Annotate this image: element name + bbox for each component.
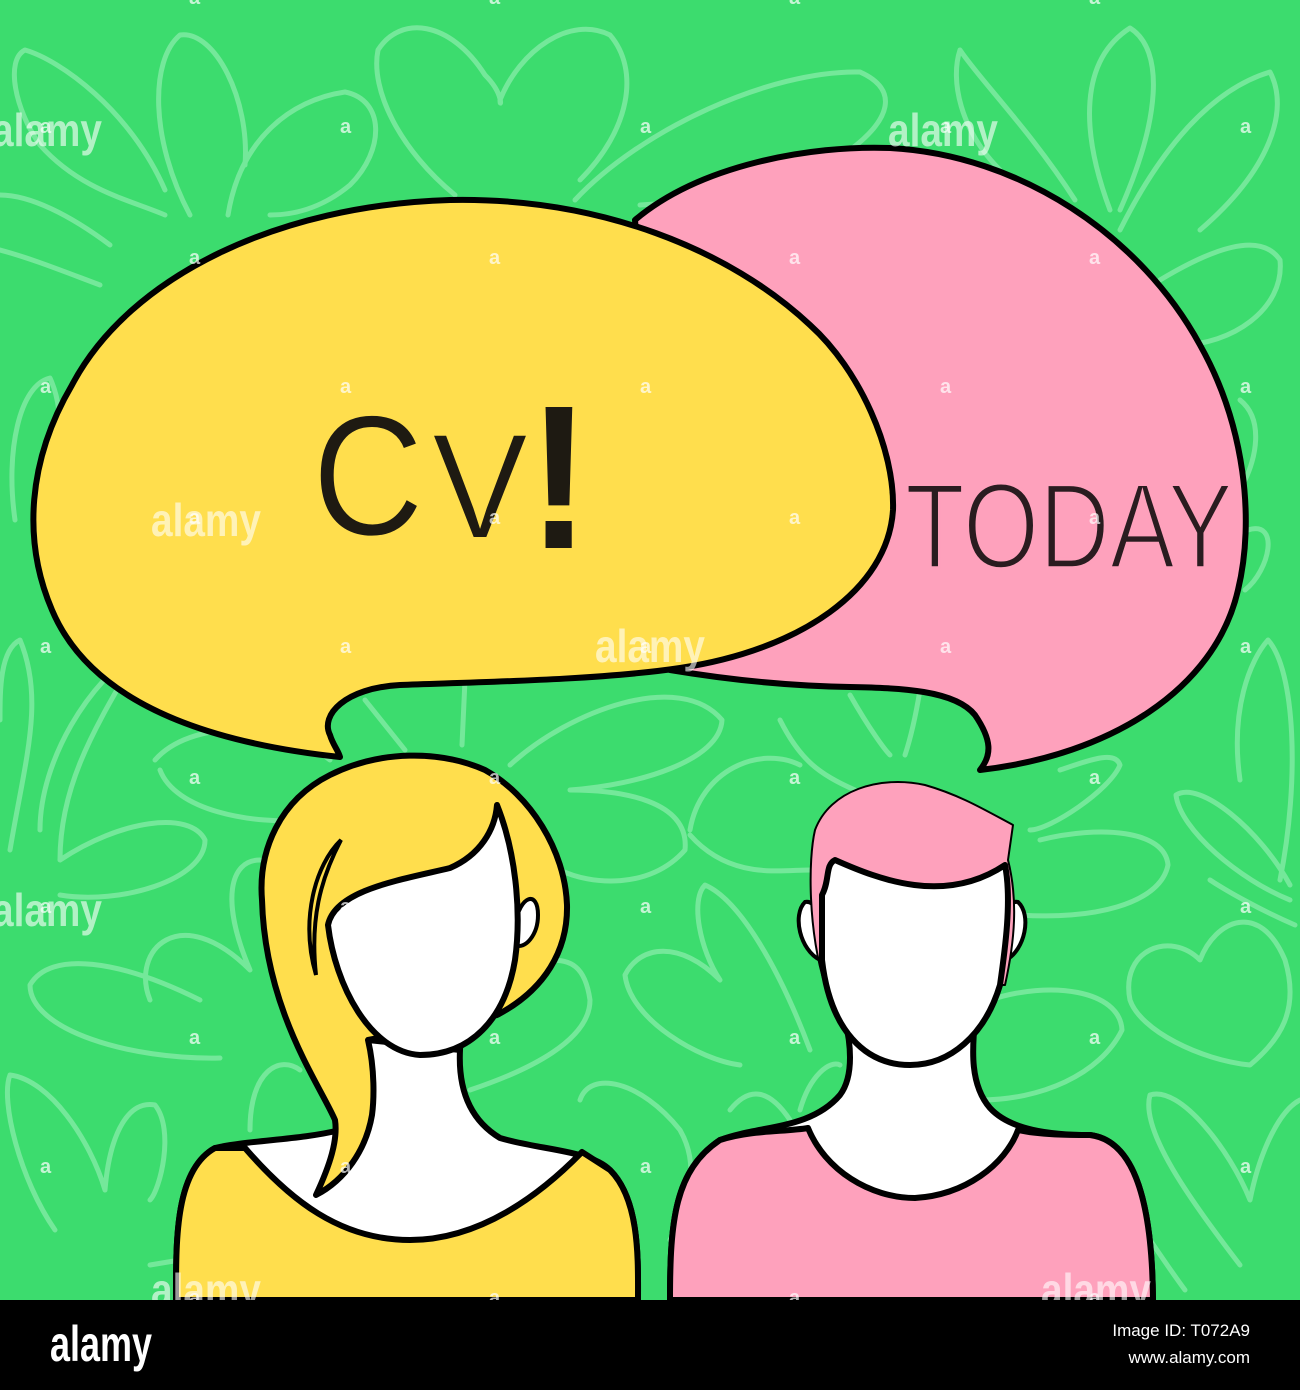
man body [670,1020,1153,1300]
woman face [328,805,518,1055]
woman figure [176,756,638,1300]
footer logo: alamy [50,1316,152,1372]
man hair [811,782,1014,985]
watermarks: alamy [1041,1264,1151,1316]
man ears [799,902,1025,960]
watermarks: alamy [151,1264,261,1316]
footer url: www.alamy.com [1127,1348,1250,1367]
watermarks [0,104,1151,1316]
woman ear [515,899,538,946]
woman hair strand [309,840,341,975]
woman hair [262,756,567,1195]
watermarks: alamy [151,494,261,546]
watermarks: alamy [595,620,705,672]
label: CV! [312,363,590,592]
yellow speech bubble [33,200,893,757]
pink speech bubble [635,148,1246,770]
man face [822,860,1008,1065]
footer image id: Image ID: T072A9 [1112,1321,1250,1340]
label: CV!: ! [528,363,590,592]
label: CV!: V [432,402,528,570]
man figure [670,782,1153,1300]
woman body [176,1040,638,1300]
watermarks: alamy [888,104,998,156]
label: CV!: C [312,380,424,572]
